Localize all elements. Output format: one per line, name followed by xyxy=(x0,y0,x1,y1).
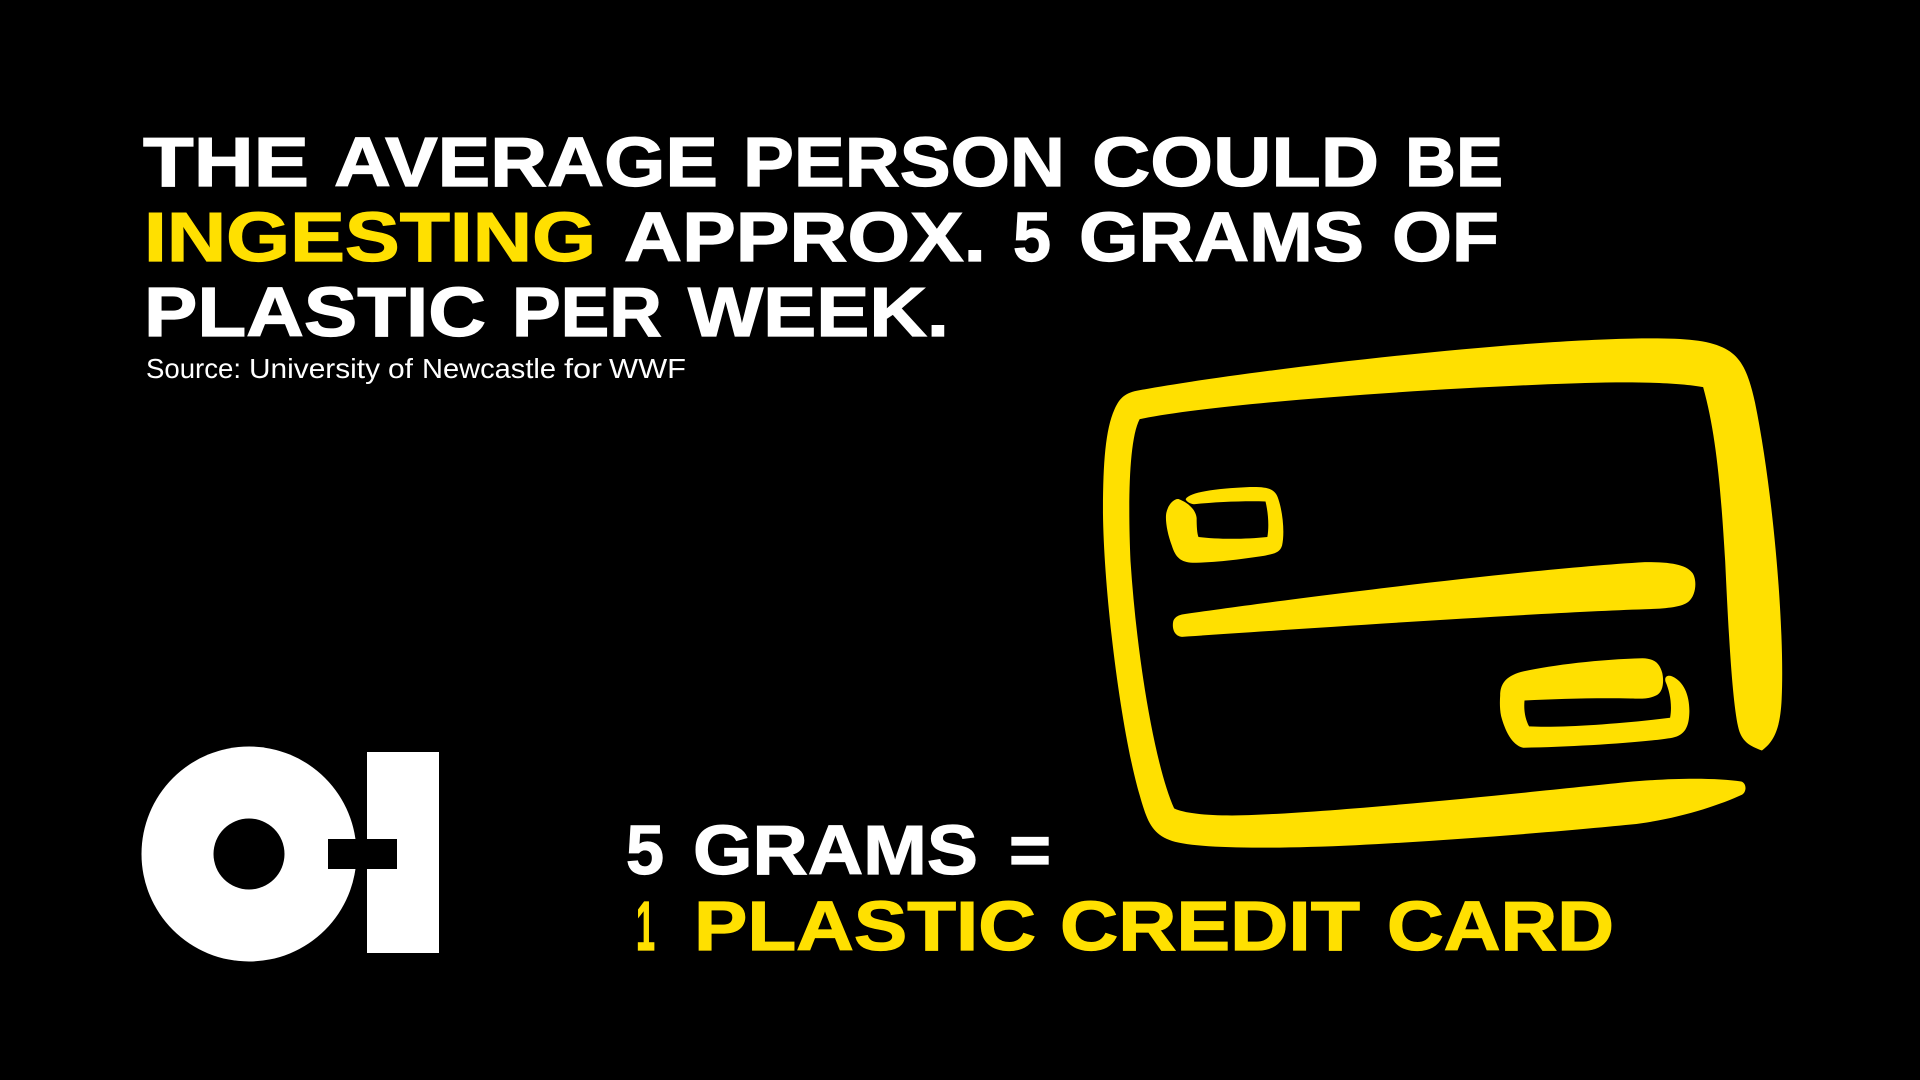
equivalence statement xyxy=(626,811,1614,965)
source note: of xyxy=(388,353,413,384)
headline: AVERAGE xyxy=(334,123,718,201)
card logo box xyxy=(1500,658,1689,748)
equivalence statement: 5 xyxy=(626,811,664,889)
headline: THE xyxy=(143,123,309,201)
headline: BE xyxy=(1405,123,1503,201)
headline: 5 xyxy=(1013,198,1051,276)
equivalence statement: CREDIT xyxy=(1060,887,1360,965)
source note: Newcastle xyxy=(422,353,556,384)
headline: INGESTING xyxy=(144,198,596,276)
icon: credit card xyxy=(1103,338,1782,848)
headline: PERSON xyxy=(743,123,1065,201)
source note: for xyxy=(564,353,602,384)
headline: WEEK. xyxy=(688,273,949,351)
equivalence statement: GRAMS xyxy=(693,811,978,889)
O-I logo xyxy=(142,746,439,962)
source note: Source: xyxy=(146,353,241,384)
headline: APPROX. xyxy=(624,198,986,276)
source note: University xyxy=(249,353,380,384)
card chip xyxy=(1166,487,1283,563)
headline: PLASTIC xyxy=(144,273,486,351)
headline xyxy=(143,123,1503,351)
card frame xyxy=(1103,338,1782,848)
equivalence statement: PLASTIC xyxy=(694,887,1036,965)
headline: OF xyxy=(1392,198,1499,276)
source note: WWF xyxy=(609,353,686,384)
source note xyxy=(146,353,686,384)
headline: PER xyxy=(512,273,662,351)
card stripe xyxy=(1173,562,1695,637)
headline: GRAMS xyxy=(1079,198,1364,276)
equivalence statement: 1 xyxy=(636,887,655,965)
equivalence statement: CARD xyxy=(1387,887,1614,965)
equivalence statement: = xyxy=(1009,811,1051,889)
headline: COULD xyxy=(1092,123,1379,201)
